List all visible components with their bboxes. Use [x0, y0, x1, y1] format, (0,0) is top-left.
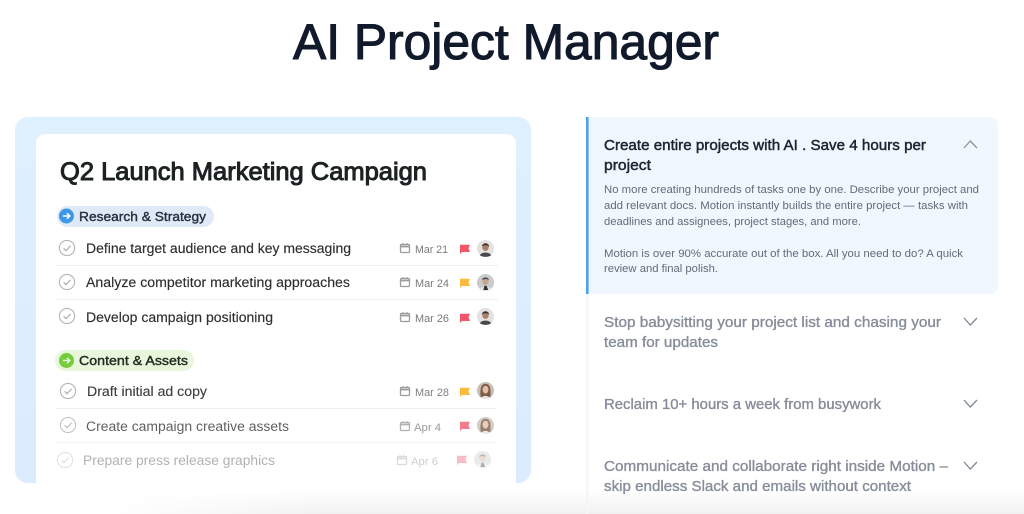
task row: creative assets: Apr 4 — [414, 422, 441, 434]
project heading: Q2 Launch Marketing Campaign — [60, 158, 427, 186]
task row: analyze competitors: Mar 24 — [415, 278, 449, 290]
active item heading: Create entire projects with AI . Save 4 hours per — [604, 138, 926, 154]
section label: Content & Assets — [79, 353, 189, 368]
task row: draft ad copy: Mar 28 — [415, 387, 449, 399]
active item background — [586, 117, 998, 294]
collapsed item: babysitting: Stop babysitting your project list and chasing your — [604, 315, 941, 331]
active item body: add relevant docs. Motion instantly builds the entire project — tasks with — [604, 200, 968, 212]
icon: green arrow — [59, 353, 74, 368]
active item body: Motion is over 90% accurate out of the box. All you need to do? A quick — [604, 248, 964, 260]
task row: press release graphics: Apr 6 — [411, 456, 438, 468]
section: research and strategy — [57, 206, 214, 227]
collapsed item: communicate: Communicate and collaborate right inside Motion – — [604, 459, 949, 475]
task row: campaign positioning — [59, 308, 494, 325]
panel: project preview — [15, 117, 531, 483]
task row: define target audience: Define target audience and key messaging — [86, 241, 351, 256]
icon: blue arrow — [59, 208, 74, 224]
panel: feature accordion — [586, 117, 998, 514]
panel background — [15, 117, 531, 483]
active item body — [604, 184, 979, 275]
collapsed item: reclaim hours: Reclaim 10+ hours a week from busywork — [604, 397, 882, 413]
section label: Research & Strategy — [79, 209, 207, 224]
collapsed item: communicate — [604, 459, 977, 495]
icon: chevron up — [964, 141, 977, 148]
task row: analyze competitors — [59, 274, 494, 291]
section pill — [55, 350, 194, 371]
task row: draft ad copy: Draft initial ad copy — [87, 384, 207, 399]
active item body: No more creating hundreds of tasks one by one. Describe your project and — [604, 184, 979, 196]
active item body: review and final polish. — [604, 263, 718, 275]
project card — [36, 134, 516, 483]
task row: creative assets: Create campaign creative assets — [86, 419, 289, 434]
task row: campaign positioning: Mar 26 — [415, 313, 449, 325]
task row: define target audience — [59, 240, 494, 257]
collapsed item: communicate: skip endless Slack and emails without context — [604, 479, 911, 495]
task row: campaign positioning: Develop campaign positioning — [86, 310, 273, 325]
accordion rail — [586, 294, 588, 514]
active item body: deadlines and assignees, project stages, and more. — [604, 216, 861, 228]
task row: creative assets — [60, 417, 494, 434]
section pill — [57, 206, 214, 227]
task row: press release graphics — [57, 451, 491, 468]
task row: press release graphics: Prepare press release graphics — [83, 453, 275, 468]
active item accent bar — [586, 117, 589, 294]
active item heading — [604, 138, 926, 174]
title: AI Project Manager — [293, 14, 719, 70]
bottom shadow — [240, 504, 1024, 514]
task row: define target audience: Mar 21 — [415, 244, 448, 256]
task row: analyze competitors: Analyze competitor marketing approaches — [86, 275, 350, 290]
section: content and assets — [55, 350, 194, 371]
task row: draft ad copy — [60, 382, 494, 399]
collapsed item: babysitting — [604, 315, 977, 351]
active item heading: project — [604, 158, 651, 174]
collapsed item: babysitting: team for updates — [604, 335, 718, 351]
